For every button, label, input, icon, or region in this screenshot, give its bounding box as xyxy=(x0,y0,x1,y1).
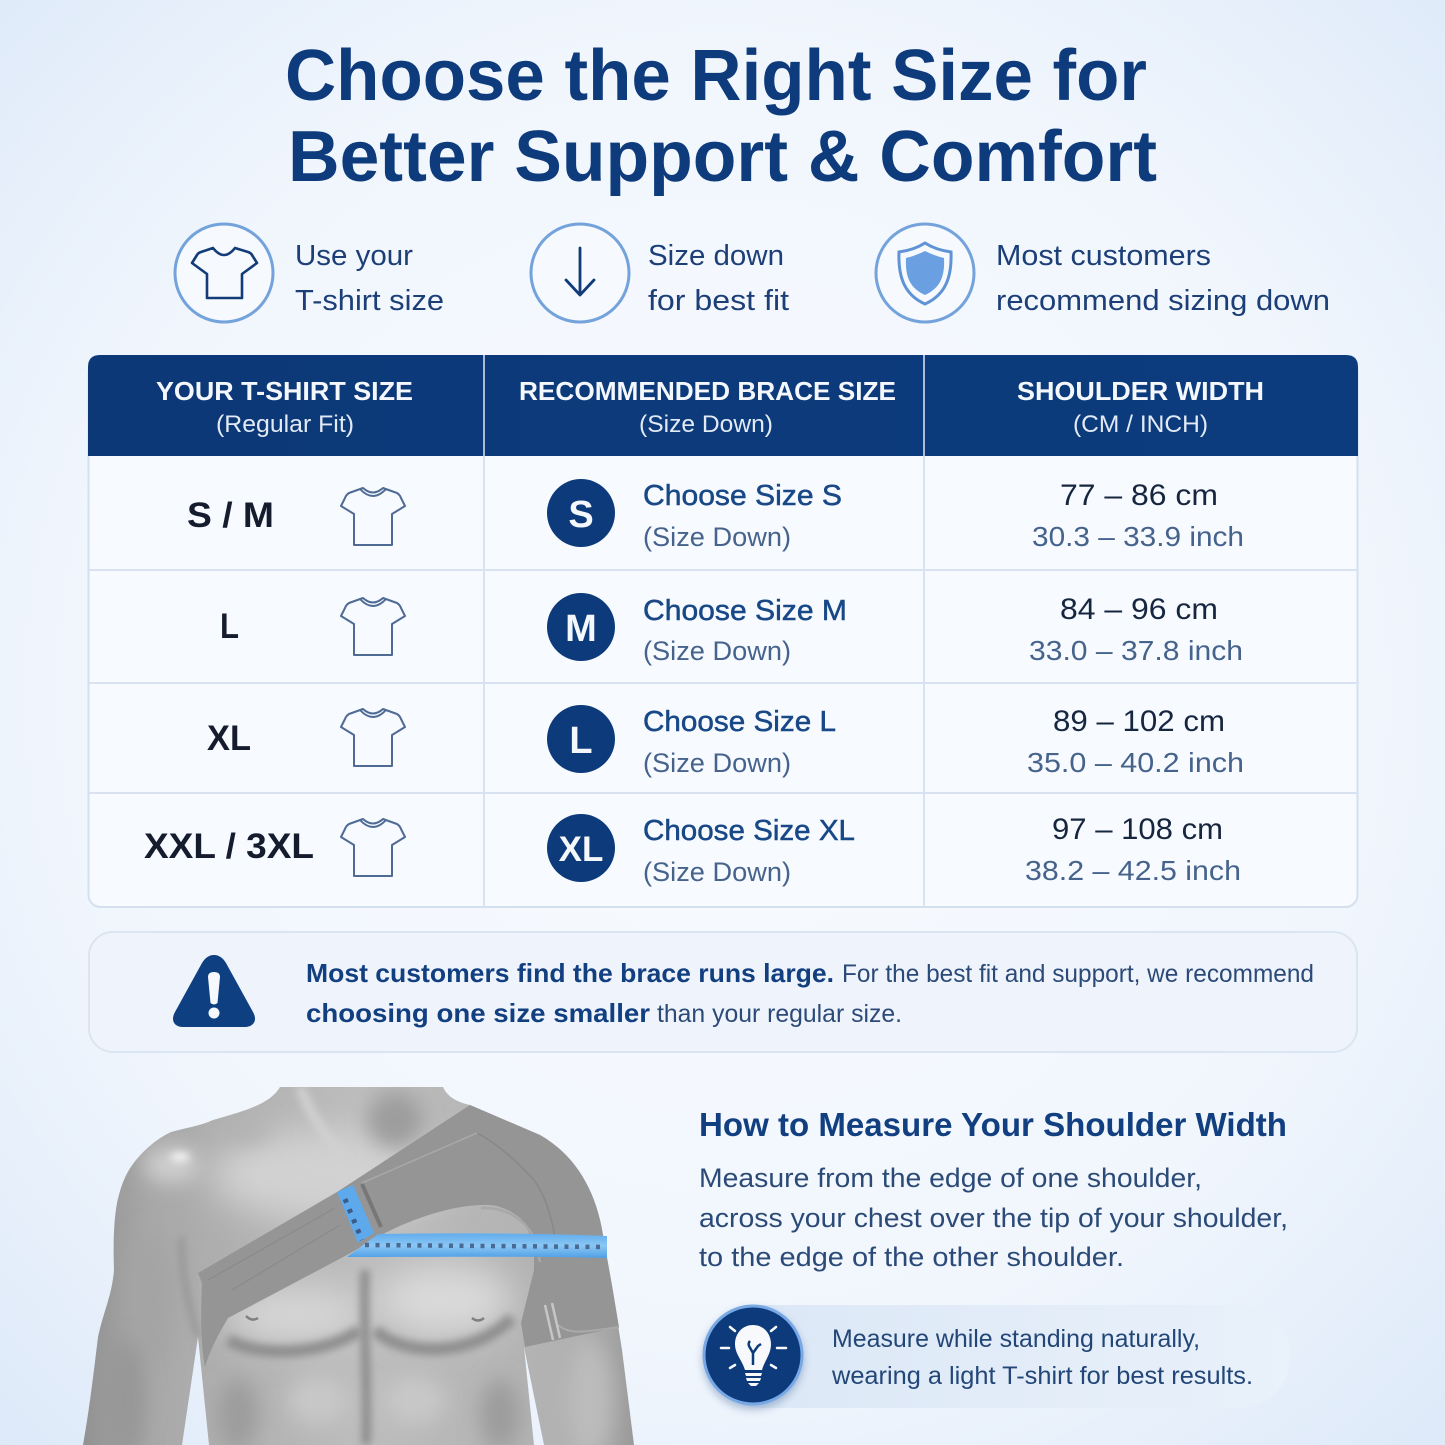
row: L xyxy=(220,593,1243,666)
table header: (Size Down) xyxy=(639,411,773,438)
row: L: L xyxy=(220,607,239,646)
instructions xyxy=(699,1163,1288,1272)
row: S / M: S / M xyxy=(187,496,274,535)
tip text xyxy=(996,240,1330,317)
callout text: Most customers find the brace runs large. xyxy=(306,958,834,988)
tip text: wearing a light T-shirt for best results. xyxy=(831,1362,1253,1390)
instructions: to the edge of the other shoulder. xyxy=(699,1242,1124,1272)
row: XXL / 3XL: XXL / 3XL xyxy=(144,827,314,866)
row: L: 84 – 96 cm xyxy=(1060,593,1218,626)
row: S / M: 30.3 – 33.9 inch xyxy=(1032,521,1244,552)
table header xyxy=(88,355,1358,456)
callout text: For the best fit and support, we recommend xyxy=(842,960,1314,988)
table header: (CM / INCH) xyxy=(1073,411,1208,438)
title xyxy=(285,36,1157,197)
row: S / M: 77 – 86 cm xyxy=(1060,479,1218,512)
badge: L xyxy=(547,705,615,773)
row: XXL / 3XL: 38.2 – 42.5 inch xyxy=(1025,855,1241,886)
tip text: Size down xyxy=(648,240,784,272)
badge: XL: XL xyxy=(559,830,603,869)
icon: t-shirt xyxy=(175,224,273,322)
tip text: for best fit xyxy=(648,285,789,317)
instructions: Measure from the edge of one shoulder, xyxy=(699,1163,1202,1193)
badge: XL xyxy=(547,814,615,882)
table header: YOUR T-SHIRT SIZE xyxy=(156,376,413,406)
icon: warning triangle xyxy=(173,955,255,1027)
row: XXL / 3XL: 97 – 108 cm xyxy=(1052,813,1223,846)
icon: down arrow xyxy=(531,224,629,322)
size table xyxy=(88,355,1358,907)
tip text: Measure while standing naturally, xyxy=(832,1325,1200,1353)
title: Better Support & Comfort xyxy=(288,117,1157,197)
callout: sizing warning xyxy=(89,932,1357,1052)
row: XXL / 3XL: (Size Down) xyxy=(643,857,791,887)
shoulder brace xyxy=(198,1105,619,1367)
tip text: T-shirt size xyxy=(295,285,444,317)
instructions: across your chest over the tip of your shoulder, xyxy=(699,1203,1288,1233)
tip text xyxy=(648,240,789,317)
heading: How to Measure Your Shoulder Width xyxy=(699,1106,1287,1143)
tip: most customers xyxy=(876,224,1330,322)
table header: SHOULDER WIDTH xyxy=(1017,376,1264,406)
row: S / M: Choose Size S xyxy=(643,480,842,512)
row: XL xyxy=(207,705,1244,778)
photo: man wearing shoulder brace with measuring tape xyxy=(70,1080,650,1445)
icon: t-shirt xyxy=(341,488,405,545)
row: XXL / 3XL xyxy=(144,813,1241,887)
callout text: choosing one size smaller xyxy=(306,998,650,1028)
callout text xyxy=(306,958,1314,1028)
tip text: recommend sizing down xyxy=(996,285,1330,317)
tip text: Use your xyxy=(295,240,413,272)
row: XL: 89 – 102 cm xyxy=(1053,705,1225,738)
tips row xyxy=(175,224,1330,322)
icon: t-shirt xyxy=(341,598,405,655)
measuring tape xyxy=(337,1185,607,1258)
tip: size down xyxy=(531,224,789,322)
callout text: than your regular size. xyxy=(657,1000,902,1028)
torso xyxy=(70,1080,650,1445)
row: L: Choose Size M xyxy=(643,595,847,627)
row: XL: (Size Down) xyxy=(643,748,791,778)
table header: RECOMMENDED BRACE SIZE xyxy=(519,376,896,406)
badge: M: M xyxy=(565,608,597,650)
row: L: (Size Down) xyxy=(643,636,791,666)
row: XL: 35.0 – 40.2 inch xyxy=(1027,747,1244,778)
tip text xyxy=(831,1325,1253,1390)
icon: t-shirt xyxy=(341,819,405,876)
title: Choose the Right Size for xyxy=(285,36,1147,116)
icon: shield xyxy=(876,224,974,322)
tip pill xyxy=(702,1305,1290,1410)
icon: light bulb xyxy=(702,1306,804,1410)
row: S / M: (Size Down) xyxy=(643,522,791,552)
row: S / M xyxy=(187,479,1244,552)
tip text: Most customers xyxy=(996,240,1211,272)
icon: t-shirt xyxy=(341,709,405,766)
badge: S: S xyxy=(568,494,594,536)
table header: (Regular Fit) xyxy=(216,411,354,438)
badge: S xyxy=(547,479,615,547)
table body xyxy=(88,360,1358,907)
tip: use your t-shirt size xyxy=(175,224,444,322)
row: XL: Choose Size L xyxy=(643,706,836,738)
row: L: 33.0 – 37.8 inch xyxy=(1029,635,1243,666)
row: XL: XL xyxy=(207,719,251,758)
row: XXL / 3XL: Choose Size XL xyxy=(643,815,855,847)
badge: M xyxy=(547,593,615,661)
badge: L: L xyxy=(569,720,593,762)
tip text xyxy=(295,240,444,317)
how to measure xyxy=(699,1106,1290,1410)
